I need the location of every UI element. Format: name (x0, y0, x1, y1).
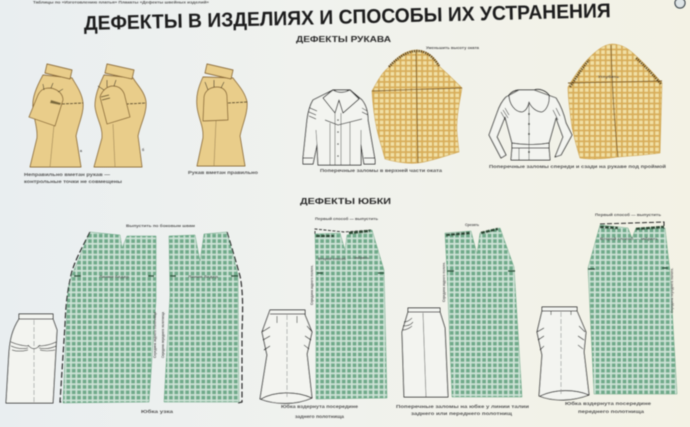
bodice with correctly placed sleeve (197, 64, 247, 166)
sleeve pattern, underarm defect: Углубить (598, 75, 620, 79)
heading: sleeve defects: ДЕФЕКТЫ РУКАВА (296, 34, 391, 44)
back panel pattern, skirt too narrow (60, 232, 156, 403)
pattern, pulled at the front (588, 213, 677, 394)
caption: pulled at the back (281, 403, 359, 419)
jacket drawing (303, 90, 375, 165)
vertical seam labels (153, 311, 165, 358)
caption: pulled at the front: переднего полотнища (578, 409, 645, 414)
pattern, pulled at the back: Второй способ (318, 257, 347, 261)
instruction: let out side seams: Выпустить по боковым швам (126, 224, 195, 228)
pattern, pulled at the back (310, 217, 387, 399)
caption: folds in upper sleeve cap: Поперечные заломы в верхней части оката (320, 167, 443, 173)
print note at top: Таблицы по «Изготовлению платья» Плакаты «Дефекты швейных изделий» (33, 0, 209, 4)
pattern, pulled at the front: Первый способ — выпустить (595, 213, 662, 217)
pattern, pulled at the front: Середина переднего полотн. (670, 268, 674, 313)
caption: sleeve basted correctly: Рукав вметан правильно (188, 170, 258, 175)
caption: sleeve basted incorrectly: контрольные точки не совмещены (24, 179, 122, 184)
bodice with misplaced sleeve, variant b (94, 64, 146, 167)
small skirt, folds at the waist (402, 308, 448, 397)
sleeve pattern, underarm defect (568, 44, 662, 159)
blouse drawing (489, 89, 572, 160)
front panel pattern, skirt too narrow (164, 232, 243, 403)
caption: folds at the waist: Поперечные заломы на юбке у линии талии (396, 403, 529, 409)
pattern, folds at the waist: Середина заднего полотн. (442, 262, 446, 302)
caption: pulled at the back: Юбка вздернута посередине (281, 403, 359, 409)
corner stamp (675, 0, 685, 8)
caption: pulled at the front: Юбка вздернута посередине (565, 400, 652, 406)
caption: folds at the waist (396, 403, 529, 416)
vertical seam labels: Середина переднего полотнища (161, 311, 165, 358)
heading: skirt defects: ДЕФЕКТЫ ЮБКИ (300, 196, 391, 206)
small skirt, pulled at the front (537, 307, 589, 400)
caption: sleeve basted incorrectly (24, 172, 122, 184)
vertical seam labels: Середина заднего полотнища (153, 311, 157, 358)
pattern, pulled at the front: Второй способ — забрать (600, 237, 659, 241)
bodice with misplaced sleeve, variant a: а (80, 149, 83, 153)
caption: pulled at the back: заднего полотнища (295, 414, 344, 419)
back panel pattern, skirt too narrow: Линия бедер (99, 275, 130, 279)
bodice with misplaced sleeve, variant a (29, 64, 83, 167)
title: ДЕФЕКТЫ В ИЗДЕЛИЯХ И СПОСОБЫ ИХ УСТРАНЕНИЯ (84, 0, 611, 35)
caption: skirt too narrow: Юбка узка (141, 408, 174, 414)
sleeve pattern, upper cap defect: Уменьшить высоту оката (426, 46, 480, 50)
caption: folds under armhole: Поперечные заломы спереди и сзади на рукаве под проймой (489, 163, 666, 169)
sleeve pattern, upper cap defect (372, 46, 480, 163)
pattern, folds at the waist (442, 223, 522, 397)
small skirt, pulled at the back (260, 310, 312, 403)
pattern, pulled at the back: — забрать (349, 256, 370, 260)
pattern, pulled at the back: Первый способ — выпустить (315, 217, 379, 221)
bodice with misplaced sleeve, variant b: б (142, 148, 145, 152)
front panel pattern, skirt too narrow: Линия бедер (188, 275, 219, 279)
pattern, pulled at the back: Середина заднего полотн. (310, 265, 314, 305)
small skirt, too narrow (6, 314, 57, 403)
caption: sleeve basted incorrectly: Неправильно вметан рукав — (24, 172, 110, 177)
caption: folds at the waist: заднего или переднего полотнищ (411, 411, 512, 416)
pattern, folds at the waist: Срезать (465, 223, 480, 227)
caption: pulled at the front (565, 400, 652, 414)
